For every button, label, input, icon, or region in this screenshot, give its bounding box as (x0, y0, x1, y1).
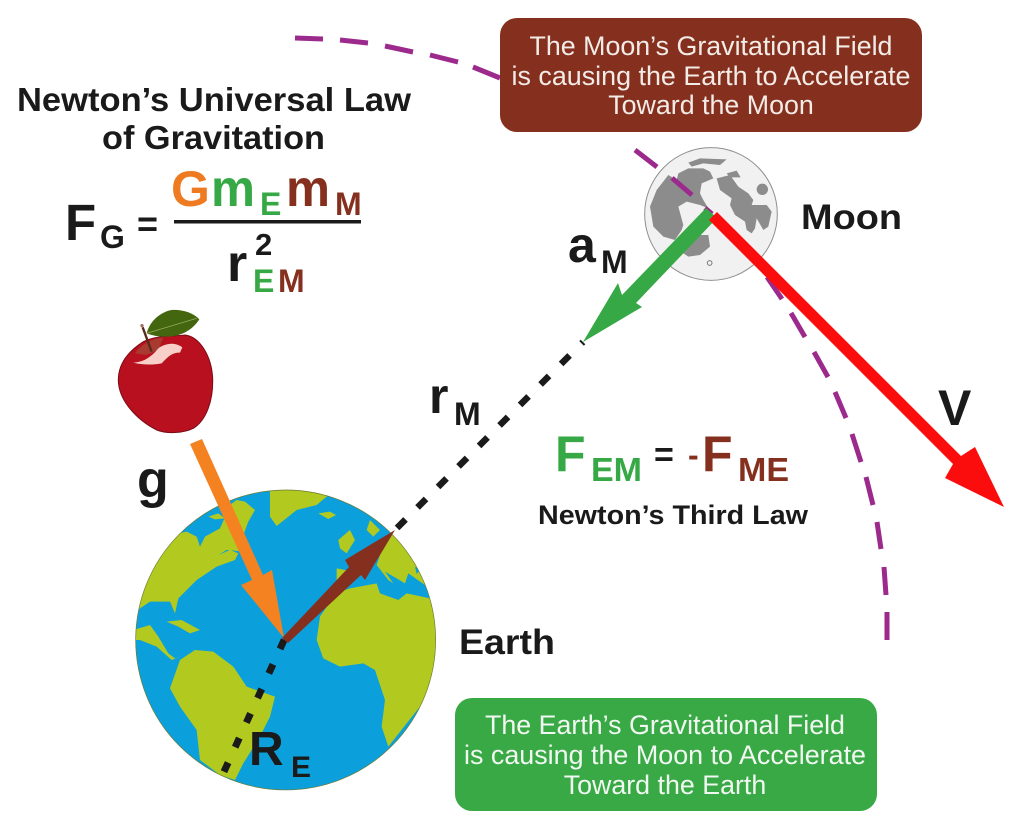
label: Earth: Earth (459, 623, 555, 662)
formula: gravitational force: E (260, 186, 281, 222)
label: R_E: E (291, 751, 311, 784)
formula: gravitational force: M (278, 263, 305, 299)
panel: Earth's field callout (455, 698, 877, 811)
label: V: V (938, 380, 972, 436)
formula: Newton's third law (555, 426, 789, 488)
arrow: green Moon acceleration (583, 208, 717, 342)
dotted line: Earth to Moon distance (395, 342, 583, 530)
formula: Newton's third law: F (555, 426, 586, 482)
formula: gravitational force (65, 160, 362, 299)
formula: Newton's third law: F (702, 426, 733, 482)
formula: gravitational force: M (335, 186, 362, 222)
label: R_E: R (249, 723, 284, 776)
arrow: red velocity (709, 212, 1004, 507)
heading: Newton's Universal Law of Gravitation: Newton’s Universal Law (17, 81, 411, 118)
dotted line: Earth radius (222, 638, 285, 776)
formula: Newton's third law: ME (738, 451, 789, 488)
heading: Newton's Universal Law of Gravitation: of Gravitation (102, 119, 325, 156)
formula: Newton's third law: = (654, 436, 674, 474)
label: Moon: Moon (801, 198, 902, 237)
label: a_M: a (568, 217, 596, 273)
formula: gravitational force: r (227, 235, 247, 293)
label: r_M: r (429, 368, 448, 424)
formula: gravitational force: m (211, 160, 255, 218)
formula: Newton's third law: - (688, 437, 699, 473)
panel: Earth's field callout: The Earth’s Gravitational Field (485, 710, 845, 740)
formula: gravitational force: F (65, 194, 96, 251)
formula: gravitational force: G (171, 161, 210, 217)
formula: gravitational force: m (286, 160, 330, 218)
panel: Moon's field callout: is causing the Earth to Accelerate (512, 61, 910, 91)
formula: gravitational force: G (100, 219, 125, 255)
label: a_M: M (601, 244, 628, 280)
orbit path: dashed purple arc (295, 38, 887, 640)
panel: Earth's field callout: is causing the Moon to Accelerate (464, 740, 866, 770)
label: r_M: M (454, 396, 481, 432)
formula: gravitational force: 2 (255, 227, 272, 262)
panel: Moon's field callout: The Moon’s Gravitational Field (530, 31, 892, 61)
arrow: g orange (190, 439, 284, 638)
panel: Moon's field callout (500, 18, 922, 132)
icon: Moon (645, 148, 777, 280)
panel: Earth's field callout: Toward the Earth (564, 770, 766, 800)
formula: Newton's third law: EM (591, 451, 642, 488)
panel: Moon's field callout: Toward the Moon (608, 90, 814, 120)
icon: apple (118, 310, 213, 433)
formula: gravitational force: = (137, 203, 158, 244)
heading: Newton's Universal Law of Gravitation (17, 81, 411, 156)
label: g: g (137, 451, 169, 509)
arrow: brown Earth acceleration (282, 530, 395, 643)
text: Newton's Third Law: Newton’s Third Law (538, 500, 809, 530)
formula: gravitational force: E (253, 263, 274, 299)
icon: Earth globe (133, 490, 438, 790)
